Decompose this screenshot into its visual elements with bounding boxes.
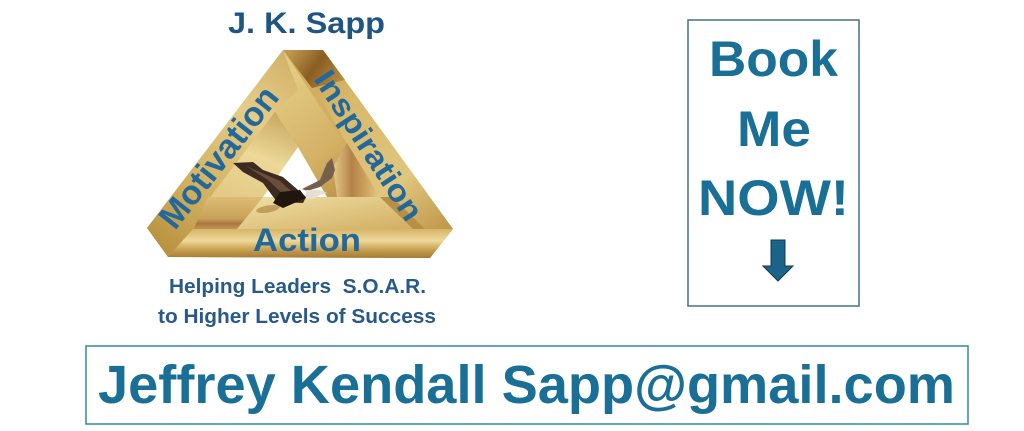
panel: email address	[86, 346, 968, 424]
call to action text: Book	[709, 31, 838, 87]
logo: gold impossible triangle	[147, 50, 453, 258]
label: Motivation: Motivation	[151, 79, 287, 236]
icon: down arrow	[763, 240, 793, 281]
right band	[283, 50, 453, 229]
call to action text	[698, 31, 849, 226]
middle band	[275, 50, 380, 197]
front wing	[233, 162, 306, 203]
wing highlight	[246, 166, 292, 195]
rear wing	[302, 158, 335, 191]
panel: Book Me Now	[688, 20, 859, 306]
icon: flying eagle	[233, 158, 335, 215]
top dark strip	[283, 50, 345, 88]
inner light face	[208, 112, 298, 200]
tagline	[158, 276, 436, 328]
tagline: to Higher Levels of Success	[158, 306, 436, 328]
floor shelf	[237, 197, 413, 229]
call to action text: Me	[737, 101, 811, 157]
white centre opening	[263, 147, 327, 197]
left band	[147, 50, 298, 257]
right corner shade	[380, 197, 425, 229]
call to action text: NOW!	[698, 170, 849, 226]
base silhouette	[147, 50, 453, 258]
tagline: Helping Leaders S.O.A.R.	[169, 276, 426, 298]
inner copper face	[333, 143, 380, 197]
inner left shelf	[193, 197, 263, 230]
heading: J. K. Sapp: J. K. Sapp	[228, 7, 385, 40]
eagle head	[306, 190, 327, 199]
body	[273, 190, 306, 208]
email text: Jeffrey Kendall Sapp@gmail.com	[98, 355, 955, 415]
bottom band	[168, 229, 453, 258]
eagle shadow	[256, 203, 280, 215]
label: Action: Action	[253, 222, 361, 258]
label: Inspiration: Inspiration	[307, 64, 430, 227]
